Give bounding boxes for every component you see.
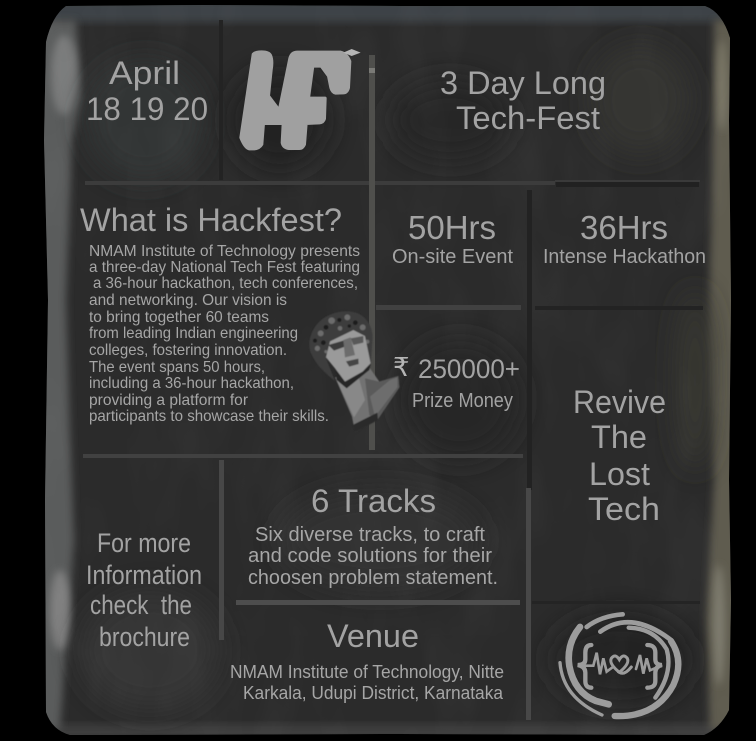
panel: venue [230, 618, 504, 703]
text block: about Hackfest: and networking. Our vision is [89, 292, 287, 309]
text block: about Hackfest: colleges, fostering innovation. [89, 342, 287, 359]
icon: circular heartbeat logo [560, 614, 678, 716]
date text: April [109, 55, 180, 91]
date text [86, 55, 208, 127]
heading: 3 Day Long Tech-Fest: Tech-Fest [456, 100, 600, 136]
panel: venue: NMAM Institute of Technology, Nitte [230, 662, 504, 682]
tagline: Revive The Lost Tech [573, 384, 666, 527]
stat: prize money: 250000+ [418, 354, 520, 384]
stat: prize money: ₹ [393, 352, 410, 382]
text block: about Hackfest: participants to showcase their skills. [89, 408, 329, 425]
panel: venue: Karkala, Udupi District, Karnataka [243, 683, 504, 703]
stat: 36Hrs intense hackathon: 36Hrs [580, 209, 668, 246]
tagline: Revive The Lost Tech: Tech [588, 491, 660, 527]
text block: brochure note: For more [97, 528, 191, 558]
text block: brochure note: check the [90, 590, 192, 620]
panel: 6 tracks: choosen problem statement. [248, 567, 498, 589]
icon: HF logo [241, 49, 361, 149]
stat: 50Hrs on-site event: On-site Event [392, 246, 513, 268]
heading: What is Hackfest?: What is Hackfest? [80, 202, 342, 238]
text block: about Hackfest: providing a platform for [89, 392, 249, 409]
panel: carved groove grid [83, 20, 703, 720]
tagline: Revive The Lost Tech: The [591, 419, 647, 455]
text block: about Hackfest: to bring together 60 teams [89, 309, 269, 326]
tagline: Revive The Lost Tech: Lost [589, 456, 650, 492]
text block: about Hackfest: from leading Indian engineering [89, 325, 298, 342]
heading: 3 Day Long Tech-Fest [440, 65, 606, 136]
text block: brochure note: brochure [99, 622, 190, 652]
text block: brochure note: Information [86, 560, 202, 590]
text block: about Hackfest [89, 243, 360, 425]
date text: 18 19 20 [86, 91, 208, 127]
panel: 6 tracks: and code solutions for their [248, 545, 492, 567]
panel: venue: Venue [327, 618, 419, 654]
stat: 50Hrs on-site event [392, 209, 513, 268]
text block: about Hackfest: a 36-hour hackathon, tech conferences, [93, 275, 358, 292]
panel: 6 tracks: 6 Tracks [311, 483, 436, 519]
text block: about Hackfest: including a 36-hour hackathon, [89, 375, 294, 392]
text block: brochure note [86, 528, 202, 652]
stat: prize money: Prize Money [412, 390, 513, 412]
icon: classical marble bust [309, 311, 399, 432]
text block: about Hackfest: a three-day National Tech Fest featuring [89, 259, 360, 276]
tagline: Revive The Lost Tech: Revive [573, 384, 666, 420]
panel: 6 tracks: Six diverse tracks, to craft [255, 524, 485, 546]
heading: 3 Day Long Tech-Fest: 3 Day Long [440, 65, 606, 101]
stat: 36Hrs intense hackathon [543, 209, 706, 268]
stat: 36Hrs intense hackathon: Intense Hackathon [543, 246, 706, 268]
stat: 50Hrs on-site event: 50Hrs [408, 209, 496, 246]
text block: about Hackfest: NMAM Institute of Technology presents [89, 243, 360, 260]
text block: about Hackfest: The event spans 50 hours, [89, 359, 265, 376]
stat: prize money [393, 352, 520, 412]
panel: 6 tracks [248, 483, 498, 589]
